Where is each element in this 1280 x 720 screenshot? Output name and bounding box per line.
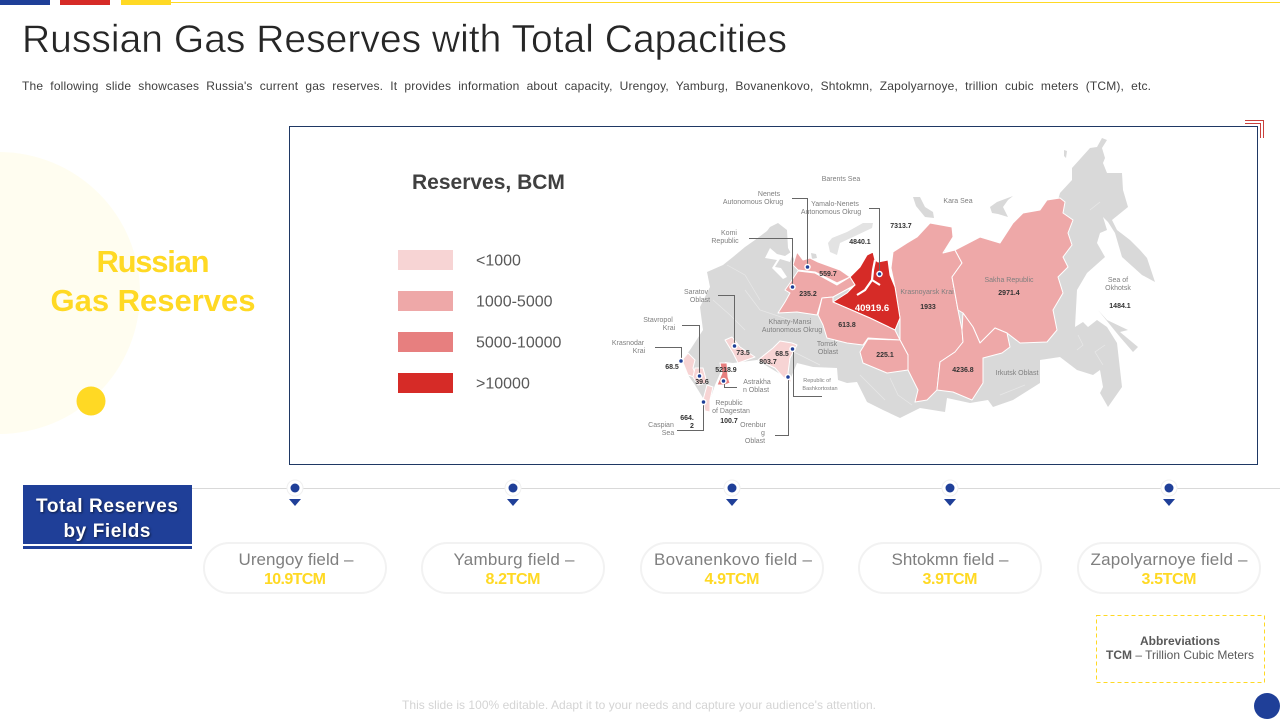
reserve values: 803.7	[759, 359, 777, 366]
reserve values: 5218.9	[715, 367, 737, 374]
timeline item: Zapolyarnoye: 3.5TCM	[1142, 571, 1196, 588]
reserve values: 225.1	[876, 352, 894, 359]
region labels: Sea	[662, 430, 674, 437]
region labels: g	[761, 430, 765, 437]
legend	[398, 250, 562, 393]
legend: <1000	[476, 252, 521, 270]
reserve values	[665, 223, 1131, 430]
region labels: Saratov	[684, 289, 709, 296]
region labels: Krasnoyarsk Krai	[900, 289, 954, 296]
region labels: Stavropol	[643, 317, 673, 324]
reserve values: 664.	[680, 415, 694, 422]
reserve values: 68.5	[775, 351, 789, 358]
top accent bars	[0, 0, 1280, 5]
timeline item: Yamburg: 8.2TCM	[486, 571, 540, 588]
region: Khanty-Mansi	[818, 297, 900, 345]
subtitle text: The following slide showcases Russia's current gas reserves. It provides information about capacity, Urengoy, Yamburg, Bovanenkovo, Shtokmn, Zapolyarnoye, trillion cubic meters (TCM), etc.	[22, 79, 1151, 93]
region labels: Yamalo-Nenets	[811, 201, 859, 208]
region labels: Krasnodar	[612, 340, 645, 347]
region: Komi	[778, 271, 855, 315]
footer note: This slide is 100% editable. Adapt it to your needs and capture your audience's attention.	[402, 698, 876, 712]
decorative circle with side heading: Gas Reserves	[50, 283, 256, 318]
location markers	[678, 264, 882, 404]
timeline item: Urengoy	[204, 480, 386, 593]
panel: reserves map	[290, 126, 1258, 464]
region labels: Oblast	[745, 438, 765, 445]
region: Krasnoyarsk Krai	[891, 223, 963, 402]
timeline item: Urengoy: Urengoy field –	[238, 550, 354, 569]
region labels: Krai	[663, 325, 676, 332]
reserve values: 2971.4	[998, 290, 1020, 297]
internal borders	[713, 202, 1105, 405]
region: Sakha Republic	[952, 198, 1073, 343]
base land	[682, 138, 1155, 418]
region labels: Okhotsk	[1105, 285, 1131, 292]
timeline item: Bovanenkovo	[641, 480, 823, 593]
region labels	[612, 176, 1131, 445]
region: 4236.8	[937, 313, 1010, 400]
region labels: Sakha Republic	[984, 277, 1034, 284]
white sea	[765, 248, 794, 279]
region: Orenburg and Bashkortostan	[758, 341, 797, 383]
region labels: Nenets	[758, 191, 781, 198]
decorative circle with side heading	[0, 152, 256, 434]
region: Nenets	[793, 252, 850, 283]
region labels: Caspian	[648, 422, 674, 429]
reserve values: 1484.1	[1109, 303, 1131, 310]
legend: 1000-5000	[476, 294, 553, 310]
region labels: Republic of	[803, 378, 831, 384]
icon: panel corner accent	[1245, 120, 1264, 138]
region: Astrakhan	[717, 363, 730, 385]
timeline item: Bovanenkovo: Bovanenkovo field –	[654, 550, 813, 569]
heading: total reserves by fields: by Fields	[64, 521, 150, 542]
reserve values: 4236.8	[952, 367, 974, 374]
region labels: Oblast	[690, 297, 710, 304]
reserve values: 559.7	[819, 271, 837, 278]
region labels: Oblast	[818, 349, 838, 356]
region labels: Astrakha	[743, 379, 771, 386]
reserve values: 4840.1	[849, 239, 871, 246]
region labels: Republic	[715, 400, 743, 407]
reserve values: 613.8	[838, 322, 856, 329]
region labels: Krai	[633, 348, 646, 355]
region labels: Khanty-Mansi	[769, 319, 812, 326]
region labels: of Dagestan	[712, 408, 750, 415]
legend heading: Reserves, BCM	[412, 171, 565, 194]
reserve values: 7313.7	[890, 223, 912, 230]
legend: 5000-10000	[476, 334, 562, 352]
reserve values: 40919.6	[855, 303, 889, 314]
region labels: Komi	[721, 230, 737, 237]
region labels: Orenbur	[740, 422, 767, 429]
abbreviations box: Abbreviations	[1140, 634, 1220, 648]
region: 225.1	[860, 339, 908, 373]
abbreviations box	[1096, 616, 1264, 682]
connector lines	[655, 198, 880, 436]
region: Stavropol	[693, 368, 707, 385]
region: Yamalo-Nenets	[833, 252, 900, 330]
timeline item: Shtokmn	[859, 480, 1041, 593]
region: Krasnodar	[682, 353, 697, 378]
region labels: Kara Sea	[943, 198, 973, 205]
timeline item: Shtokmn: Shtokmn field –	[892, 550, 1009, 569]
timeline item: Shtokmn: 3.9TCM	[922, 571, 978, 588]
reserve values: 100.7	[720, 418, 738, 425]
region labels: Republic	[711, 238, 739, 245]
region labels: Sea of	[1108, 277, 1128, 284]
region labels: Autonomous Okrug	[762, 327, 822, 334]
abbreviations box: TCM – Trillion Cubic Meters	[1106, 648, 1254, 662]
region labels: Autonomous Okrug	[801, 209, 861, 216]
timeline item: Yamburg: Yamburg field –	[454, 550, 575, 569]
region labels: Autonomous Okrug	[723, 199, 783, 206]
region labels: Tomsk	[817, 341, 838, 348]
timeline item: Zapolyarnoye	[1078, 480, 1260, 593]
reserve values: 39.6	[695, 379, 709, 386]
region labels: n Oblast	[743, 387, 769, 394]
reserve values: 68.5	[665, 364, 679, 371]
heading: total reserves by fields: Total Reserves	[36, 496, 178, 517]
reserve values: 235.2	[799, 291, 817, 298]
region labels: Bashkortostan	[802, 386, 838, 392]
region labels: Irkutsk Oblast	[996, 370, 1038, 377]
title: Russian Gas Reserves with Total Capacities	[22, 18, 787, 61]
heading: total reserves by fields	[23, 485, 192, 549]
timeline item: Bovanenkovo: 4.9TCM	[704, 571, 760, 588]
decorative circle with side heading: Russian	[96, 244, 210, 279]
timeline item: Zapolyarnoye: Zapolyarnoye field –	[1090, 550, 1248, 569]
timeline item: Urengoy: 10.9TCM	[264, 571, 326, 588]
region: Dagestan	[703, 385, 713, 412]
reserve values: 2	[690, 423, 694, 430]
region: Saratov	[725, 337, 755, 363]
reserve values: 73.5	[736, 350, 750, 357]
legend: >10000	[476, 376, 530, 392]
reserve values: 1933	[920, 304, 936, 311]
region labels: Barents Sea	[822, 176, 860, 183]
map of Russia	[612, 138, 1155, 445]
timeline line	[192, 488, 1280, 489]
timeline item: Yamburg	[422, 480, 604, 593]
page corner circle	[1254, 693, 1280, 719]
